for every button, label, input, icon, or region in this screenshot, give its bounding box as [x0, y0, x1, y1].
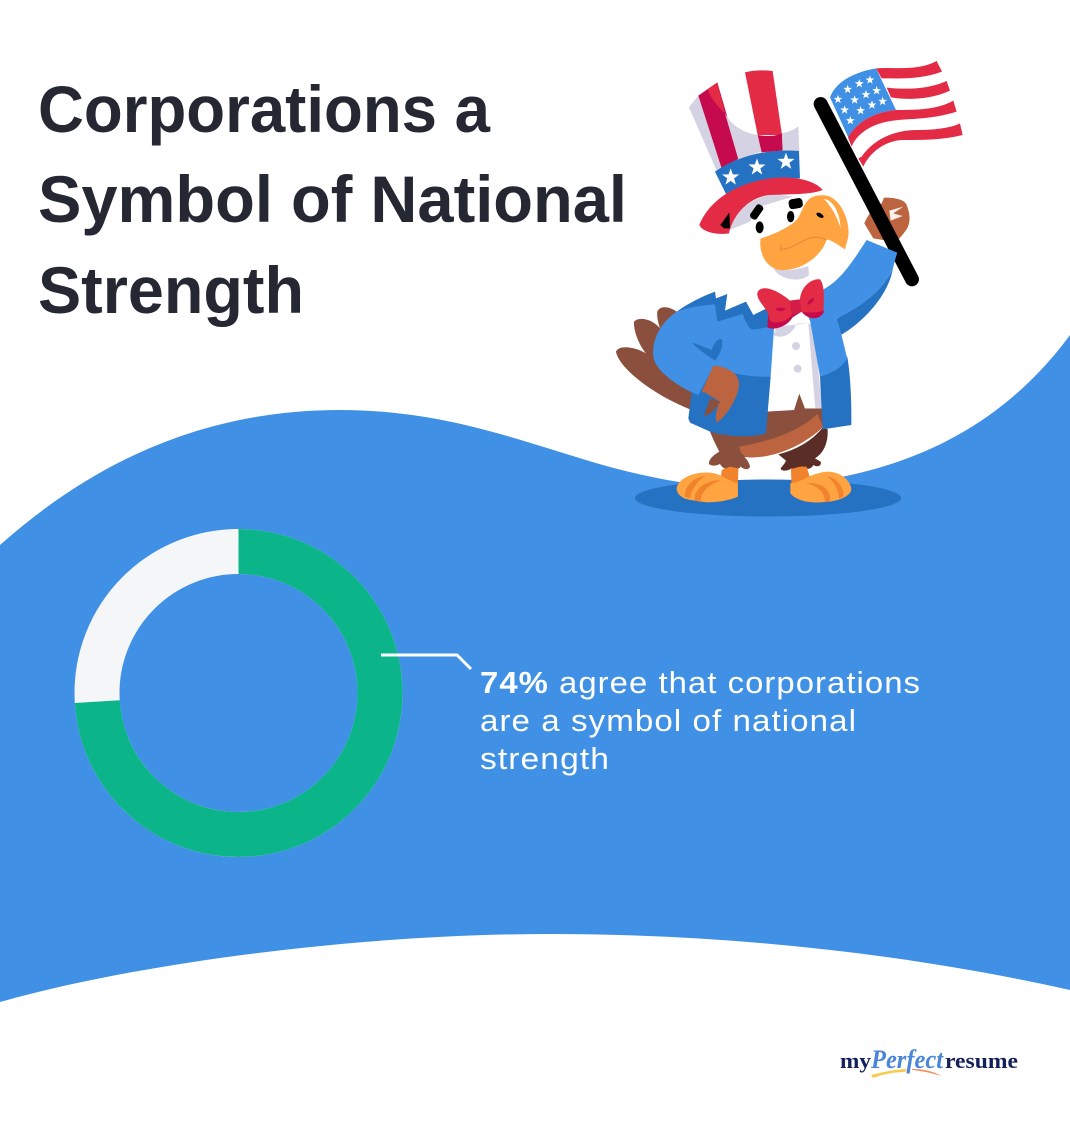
logo: myPerfectResume: my: [840, 1048, 871, 1073]
logo: myPerfectResume: resume: [945, 1048, 1018, 1073]
eagle body: [616, 270, 893, 503]
title: Strength: [38, 253, 304, 327]
callout text: [480, 665, 921, 776]
callout text: strength: [480, 741, 610, 776]
icon: eagle shadow: [635, 480, 901, 516]
flag: [830, 61, 963, 167]
bow tie: [757, 279, 824, 329]
hat: [689, 70, 823, 234]
icon: eagle mascot with hat and flag: [616, 61, 963, 503]
beak: [760, 195, 849, 270]
hand holding pole: [864, 198, 910, 242]
title: [38, 72, 627, 327]
title: Corporations a: [38, 72, 491, 146]
hat, head and flag: [689, 61, 963, 327]
donut chart: 74%: [97, 552, 380, 834]
raised arm: [807, 240, 897, 327]
callout text: are a symbol of national: [480, 703, 857, 738]
panel: blue wave background: [0, 335, 1070, 1002]
neck: [773, 266, 809, 280]
title: Symbol of National: [38, 162, 627, 236]
logo: myPerfectResume: Perfect: [870, 1045, 944, 1074]
logo: myPerfectResume: [840, 1045, 1018, 1078]
flag pole: [821, 104, 912, 279]
callout leader line: [381, 655, 471, 669]
callout text: 74% agree that corporations: [480, 665, 921, 700]
eyes and brows: [720, 197, 803, 233]
